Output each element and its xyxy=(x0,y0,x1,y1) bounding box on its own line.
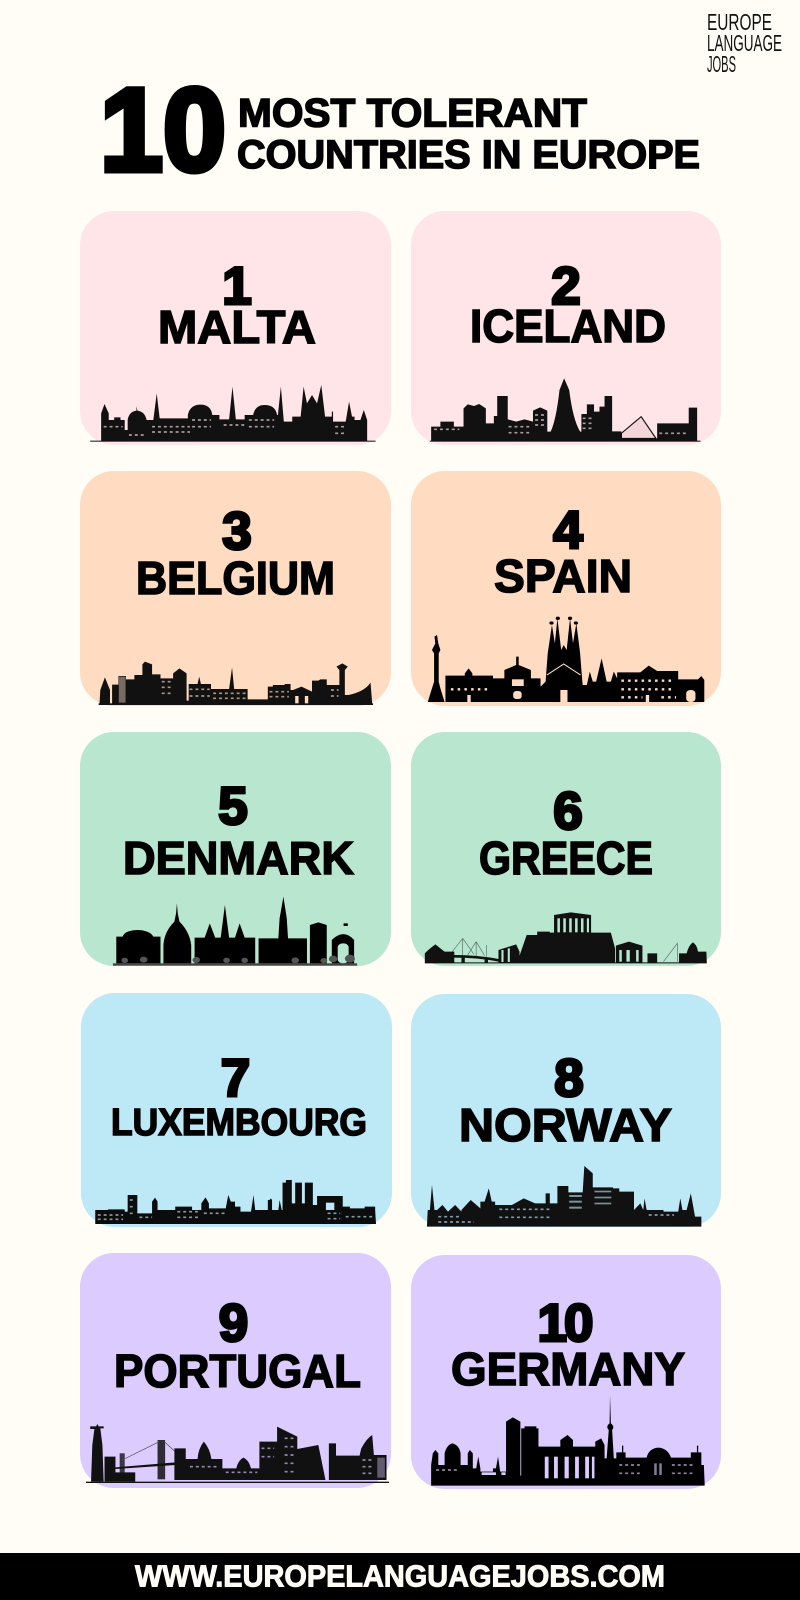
title: 10 xyxy=(100,64,226,196)
panel: Luxembourg: 7 xyxy=(221,1049,250,1108)
panel: Portugal: 9 xyxy=(219,1294,248,1353)
skyline: Norway xyxy=(427,1166,701,1227)
skyline: Greece xyxy=(425,912,707,963)
skyline: Spain xyxy=(428,617,704,702)
panel: Iceland: 2 xyxy=(551,257,581,316)
panel: Norway: NORWAY xyxy=(459,1099,672,1151)
panel: Denmark: 5 xyxy=(218,777,248,836)
footer bar xyxy=(0,1553,800,1600)
skyline: Belgium xyxy=(99,662,373,705)
panel: Germany: 10 xyxy=(538,1294,594,1353)
skyline: Luxembourg xyxy=(95,1180,376,1224)
panel: Iceland xyxy=(411,211,721,445)
skyline: Iceland xyxy=(430,378,701,442)
panel: Denmark xyxy=(80,732,391,966)
panel: Germany: GERMANY xyxy=(451,1343,685,1395)
panel: Iceland: ICELAND xyxy=(470,300,666,352)
panel: Greece: GREECE xyxy=(479,832,653,884)
panel: Belgium: 3 xyxy=(222,502,252,561)
skyline: Malta xyxy=(90,385,376,442)
panel: Malta: MALTA xyxy=(158,301,316,353)
panel: Norway xyxy=(411,994,721,1227)
footer bar: WWW.EUROPELANGUAGEJOBS.COM xyxy=(135,1558,665,1594)
panel: Spain: 4 xyxy=(553,501,583,560)
panel: Germany xyxy=(411,1255,721,1489)
panel: Portugal xyxy=(80,1253,391,1488)
panel: Luxembourg xyxy=(81,993,392,1227)
panel: Denmark: DENMARK xyxy=(123,832,354,884)
title: MOST TOLERANT xyxy=(238,92,587,136)
panel: Belgium: BELGIUM xyxy=(136,552,335,604)
title xyxy=(100,64,700,196)
panel: Greece: 6 xyxy=(553,782,583,841)
panel: Luxembourg: LUXEMBOURG xyxy=(111,1102,367,1144)
skyline: Denmark xyxy=(113,897,357,966)
panel: Malta: 1 xyxy=(222,257,252,316)
logo: Europe Language Jobs xyxy=(707,9,782,77)
panel: Spain xyxy=(411,471,721,706)
panel: Greece xyxy=(411,732,721,966)
panel: Belgium xyxy=(80,471,391,706)
title: COUNTRIES IN EUROPE xyxy=(237,133,700,177)
panel: Malta xyxy=(80,211,391,445)
logo: Europe Language Jobs: JOBS xyxy=(707,51,736,77)
panel: Portugal: PORTUGAL xyxy=(114,1345,361,1397)
skyline: Portugal xyxy=(86,1424,389,1483)
panel: Spain: SPAIN xyxy=(494,550,632,602)
skyline: Germany xyxy=(431,1395,705,1486)
panel: Norway: 8 xyxy=(554,1049,584,1108)
